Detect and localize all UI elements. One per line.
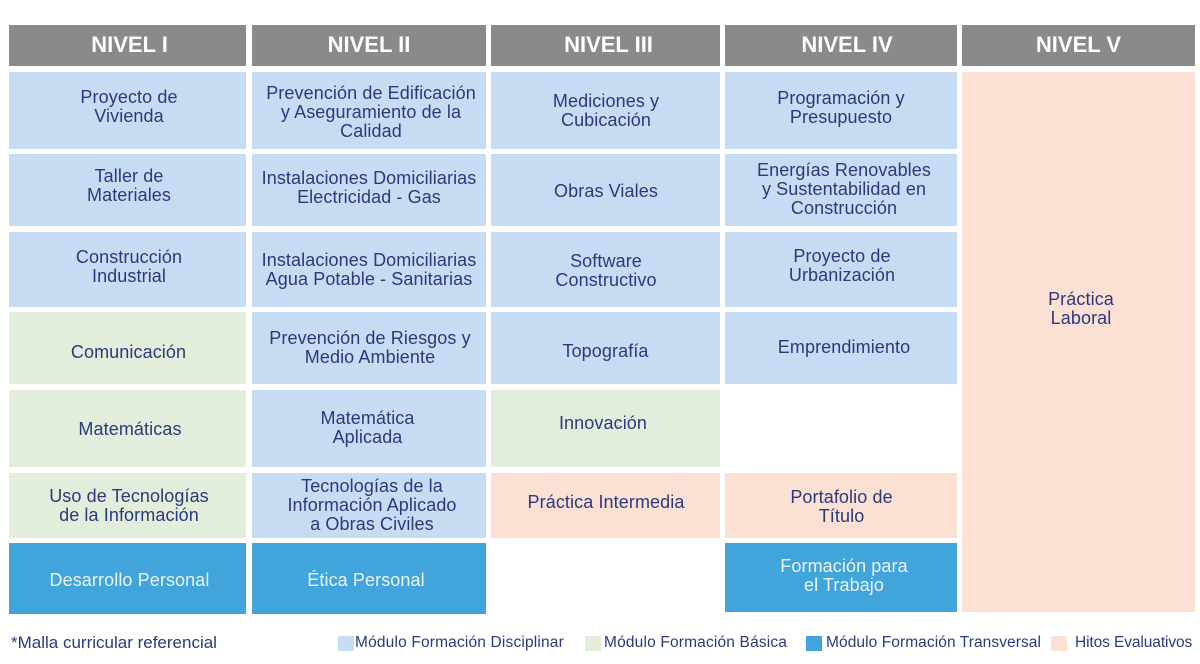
module: Uso de Tecnologías de la Información — [9, 473, 246, 538]
module: Uso de Tecnologías de la Información: Uso de Tecnologías — [49, 486, 209, 506]
module: Energías Renovables y Sustentabilidad en Construcción: Energías Renovables — [757, 160, 931, 180]
module: Instalaciones Domiciliarias Electricidad - Gas — [252, 154, 486, 226]
module: Prevención de Riesgos y Medio Ambiente: Medio Ambiente — [305, 347, 435, 367]
module: Tecnologías de la Información Aplicado a Obras Civiles: Tecnologías de la — [301, 476, 443, 496]
module: Prevención de Edificación y Aseguramiento de la Calidad: Calidad — [340, 121, 402, 141]
module: Práctica Laboral: Laboral — [1051, 308, 1111, 328]
header: Nivel IV — [725, 25, 957, 66]
module: Ética Personal — [252, 543, 486, 614]
module: Mediciones y Cubicación: Mediciones y — [553, 91, 659, 111]
header: Nivel V — [962, 25, 1195, 66]
module: Proyecto de Urbanización — [725, 232, 957, 307]
module: Prevención de Riesgos y Medio Ambiente: Prevención de Riesgos y — [269, 328, 471, 348]
module: Instalaciones Domiciliarias Agua Potable - Sanitarias: Agua Potable - Sanitarias — [266, 269, 472, 289]
module: Mediciones y Cubicación — [491, 72, 720, 149]
module: Mediciones y Cubicación: Cubicación — [561, 110, 651, 130]
module: Ética Personal: Ética Personal — [307, 570, 425, 590]
module: Energías Renovables y Sustentabilidad en Construcción — [725, 154, 957, 226]
module: Formación para el Trabajo: Formación para — [780, 556, 908, 576]
header: Nivel II — [252, 25, 486, 66]
module: Portafolio de Título: Título — [819, 506, 864, 526]
module: Instalaciones Domiciliarias Electricidad - Gas: Electricidad - Gas — [297, 187, 441, 207]
legend swatch: básica — [585, 636, 601, 651]
module: Práctica Intermedia — [491, 473, 720, 538]
header: Nivel V: NIVEL V — [1036, 32, 1121, 57]
module: Práctica Laboral: Práctica — [1048, 289, 1114, 309]
module: Comunicación — [9, 312, 246, 384]
module: Software Constructivo: Constructivo — [555, 270, 657, 290]
module: Programación y Presupuesto: Programación y — [777, 88, 905, 108]
module: Práctica Laboral — [962, 72, 1195, 612]
module: Software Constructivo — [491, 232, 720, 307]
footnote: *Malla curricular referencial — [11, 633, 217, 652]
module: Programación y Presupuesto — [725, 72, 957, 149]
module: Prevención de Edificación y Aseguramiento de la Calidad: y Aseguramiento de la — [281, 102, 461, 122]
module: Comunicación: Comunicación — [71, 342, 186, 362]
legend swatch: disciplinar — [338, 636, 354, 651]
module: Construcción Industrial — [9, 232, 246, 307]
module: Uso de Tecnologías de la Información: de la Información — [59, 505, 199, 525]
module: Prevención de Edificación y Aseguramiento de la Calidad — [252, 72, 486, 149]
module: Innovación: Innovación — [559, 413, 647, 433]
module: Emprendimiento: Emprendimiento — [778, 337, 910, 357]
module: Tecnologías de la Información Aplicado a Obras Civiles — [252, 473, 486, 538]
legend swatch: hitos — [1051, 636, 1067, 651]
module: Desarrollo Personal: Desarrollo Personal — [50, 570, 209, 590]
module: Formación para el Trabajo: el Trabajo — [804, 575, 884, 595]
module: Obras Viales — [491, 154, 720, 226]
module: Instalaciones Domiciliarias Agua Potable - Sanitarias: Instalaciones Domiciliarias — [262, 250, 476, 270]
legend label: transversal: Módulo Formación Transversal — [826, 634, 1041, 651]
module: Taller de Materiales: Materiales — [87, 185, 171, 205]
module: Proyecto de Vivienda: Proyecto de — [80, 87, 178, 107]
header: Nivel IV: NIVEL IV — [801, 32, 893, 57]
module: Innovación — [491, 390, 720, 467]
legend label: básica: Módulo Formación Básica — [604, 634, 787, 651]
module: Topografía — [491, 312, 720, 384]
module: Matemáticas: Matemáticas — [78, 419, 182, 439]
module: Proyecto de Urbanización: Urbanización — [789, 265, 895, 285]
module: Prevención de Edificación y Aseguramiento de la Calidad: Prevención de Edificación — [266, 83, 476, 103]
module: Práctica Intermedia: Práctica Intermedia — [528, 492, 684, 512]
legend label: disciplinar: Módulo Formación Disciplinar — [355, 634, 564, 651]
module: Energías Renovables y Sustentabilidad en Construcción: Construcción — [791, 198, 897, 218]
module: Taller de Materiales: Taller de — [95, 166, 163, 186]
module: Matemáticas — [9, 390, 246, 467]
module: Proyecto de Urbanización: Proyecto de — [793, 246, 891, 266]
module: Obras Viales: Obras Viales — [554, 181, 658, 201]
module: Formación para el Trabajo — [725, 543, 957, 612]
module: Energías Renovables y Sustentabilidad en Construcción: y Sustentabilidad en — [762, 179, 926, 199]
header: Nivel I — [9, 25, 246, 66]
module: Construcción Industrial: Construcción — [76, 247, 182, 267]
module: Programación y Presupuesto: Presupuesto — [790, 107, 892, 127]
module: Software Constructivo: Software — [570, 251, 642, 271]
module: Portafolio de Título: Portafolio de — [790, 487, 893, 507]
header: Nivel III: NIVEL III — [564, 32, 653, 57]
module: Proyecto de Vivienda — [9, 72, 246, 149]
module: Portafolio de Título — [725, 473, 957, 538]
module: Instalaciones Domiciliarias Electricidad - Gas: Instalaciones Domiciliarias — [262, 168, 476, 188]
module: Emprendimiento — [725, 312, 957, 384]
module: Matemática Aplicada: Matemática — [320, 408, 415, 428]
module: Prevención de Riesgos y Medio Ambiente — [252, 312, 486, 384]
module: Desarrollo Personal — [9, 543, 246, 614]
module: Matemática Aplicada — [252, 390, 486, 467]
legend label: hitos: Hitos Evaluativos — [1075, 634, 1192, 651]
header: Nivel I: NIVEL I — [91, 32, 168, 57]
legend swatch: transversal — [806, 636, 822, 651]
header: Nivel II: NIVEL II — [328, 32, 410, 57]
module: Tecnologías de la Información Aplicado a Obras Civiles: Información Aplicado — [287, 495, 457, 515]
module: Instalaciones Domiciliarias Agua Potable - Sanitarias — [252, 232, 486, 307]
header: Nivel III — [491, 25, 720, 66]
module: Construcción Industrial: Industrial — [92, 266, 166, 286]
module: Topografía: Topografía — [562, 341, 649, 361]
module: Matemática Aplicada: Aplicada — [333, 427, 402, 447]
module: Proyecto de Vivienda: Vivienda — [94, 106, 164, 126]
module: Tecnologías de la Información Aplicado a Obras Civiles: a Obras Civiles — [310, 514, 434, 534]
module: Taller de Materiales — [9, 154, 246, 226]
